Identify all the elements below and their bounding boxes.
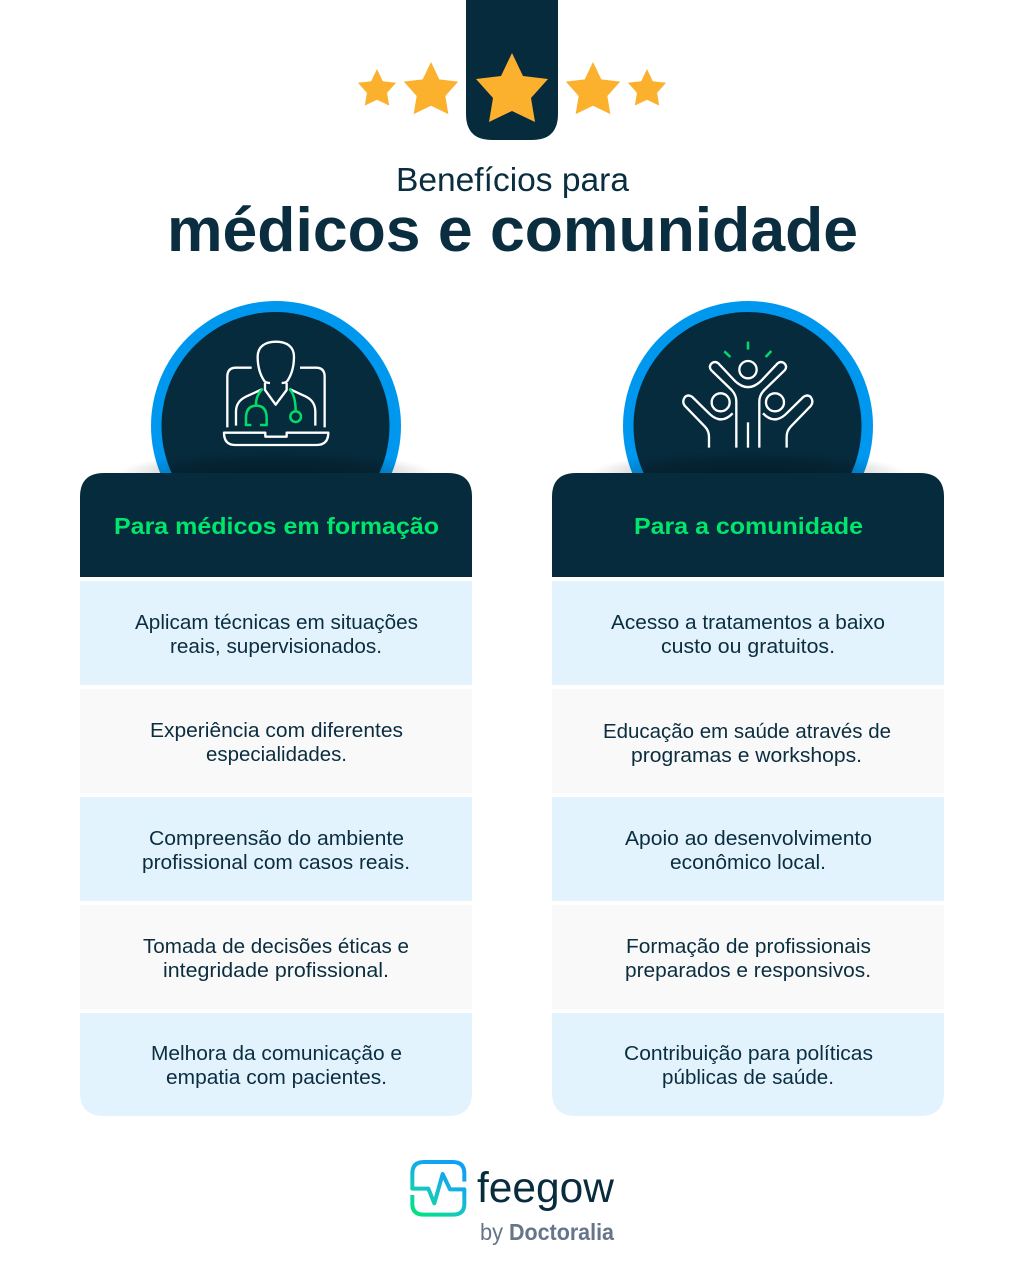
row 2 — [552, 689, 944, 793]
panel: para a comunidade — [552, 301, 944, 1116]
row 3 — [80, 797, 472, 901]
row 4: Tomada de decisões éticas e — [143, 935, 409, 958]
row 2: Educação em saúde através de — [603, 720, 891, 743]
star rating — [358, 53, 666, 122]
by Doctoralia: by — [480, 1219, 503, 1245]
row 5 — [552, 1013, 944, 1116]
row 2 — [80, 689, 472, 793]
row 3: Compreensão do ambiente — [149, 827, 404, 850]
panel: para médicos em formação — [80, 301, 472, 1116]
row 1 — [80, 581, 472, 685]
header: para médicos: Para médicos em formação — [114, 513, 439, 539]
by Doctoralia: Doctoralia — [509, 1219, 614, 1245]
row 5: públicas de saúde. — [662, 1066, 834, 1089]
row 4: integridade profissional. — [163, 959, 389, 982]
row 4: Formação de profissionais — [626, 935, 871, 958]
header: para a comunidade: Para a comunidade — [634, 513, 863, 539]
row 5: empatia com pacientes. — [166, 1066, 387, 1089]
row 3 — [552, 797, 944, 901]
logo: feegow by Doctoralia — [412, 1162, 615, 1245]
row 2: especialidades. — [206, 743, 347, 766]
row 1: Aplicam técnicas em situações — [135, 611, 418, 634]
row 3: profissional com casos reais. — [142, 851, 410, 874]
row 5 — [80, 1013, 472, 1116]
title: médicos e comunidade — [167, 196, 858, 265]
row 1: custo ou gratuitos. — [661, 635, 835, 658]
icon: doctor on laptop — [224, 342, 328, 445]
header: para a comunidade — [552, 473, 944, 577]
row 4 — [80, 905, 472, 1009]
row 5: Contribuição para políticas — [624, 1042, 873, 1065]
row 4: preparados e responsivos. — [625, 959, 871, 982]
title: Benefícios para — [396, 161, 630, 198]
icon: people celebrating — [683, 342, 812, 448]
title — [167, 161, 858, 265]
row 3: econômico local. — [670, 851, 826, 874]
badge circle: community — [588, 301, 908, 551]
icon: feegow pulse mark — [412, 1162, 464, 1215]
row 1: reais, supervisionados. — [170, 635, 382, 658]
row 2: programas e workshops. — [631, 744, 862, 767]
row 1: Acesso a tratamentos a baixo — [611, 611, 885, 634]
row 3: Apoio ao desenvolvimento — [625, 827, 872, 850]
badge circle: doctor — [116, 301, 436, 551]
row 5: Melhora da comunicação e — [151, 1042, 402, 1065]
row 2: Experiência com diferentes — [150, 719, 403, 742]
row 4 — [552, 905, 944, 1009]
row 1 — [552, 581, 944, 685]
top ribbon tab — [466, 0, 558, 140]
header: para médicos — [80, 473, 472, 577]
wordmark: feegow — [477, 1164, 615, 1212]
